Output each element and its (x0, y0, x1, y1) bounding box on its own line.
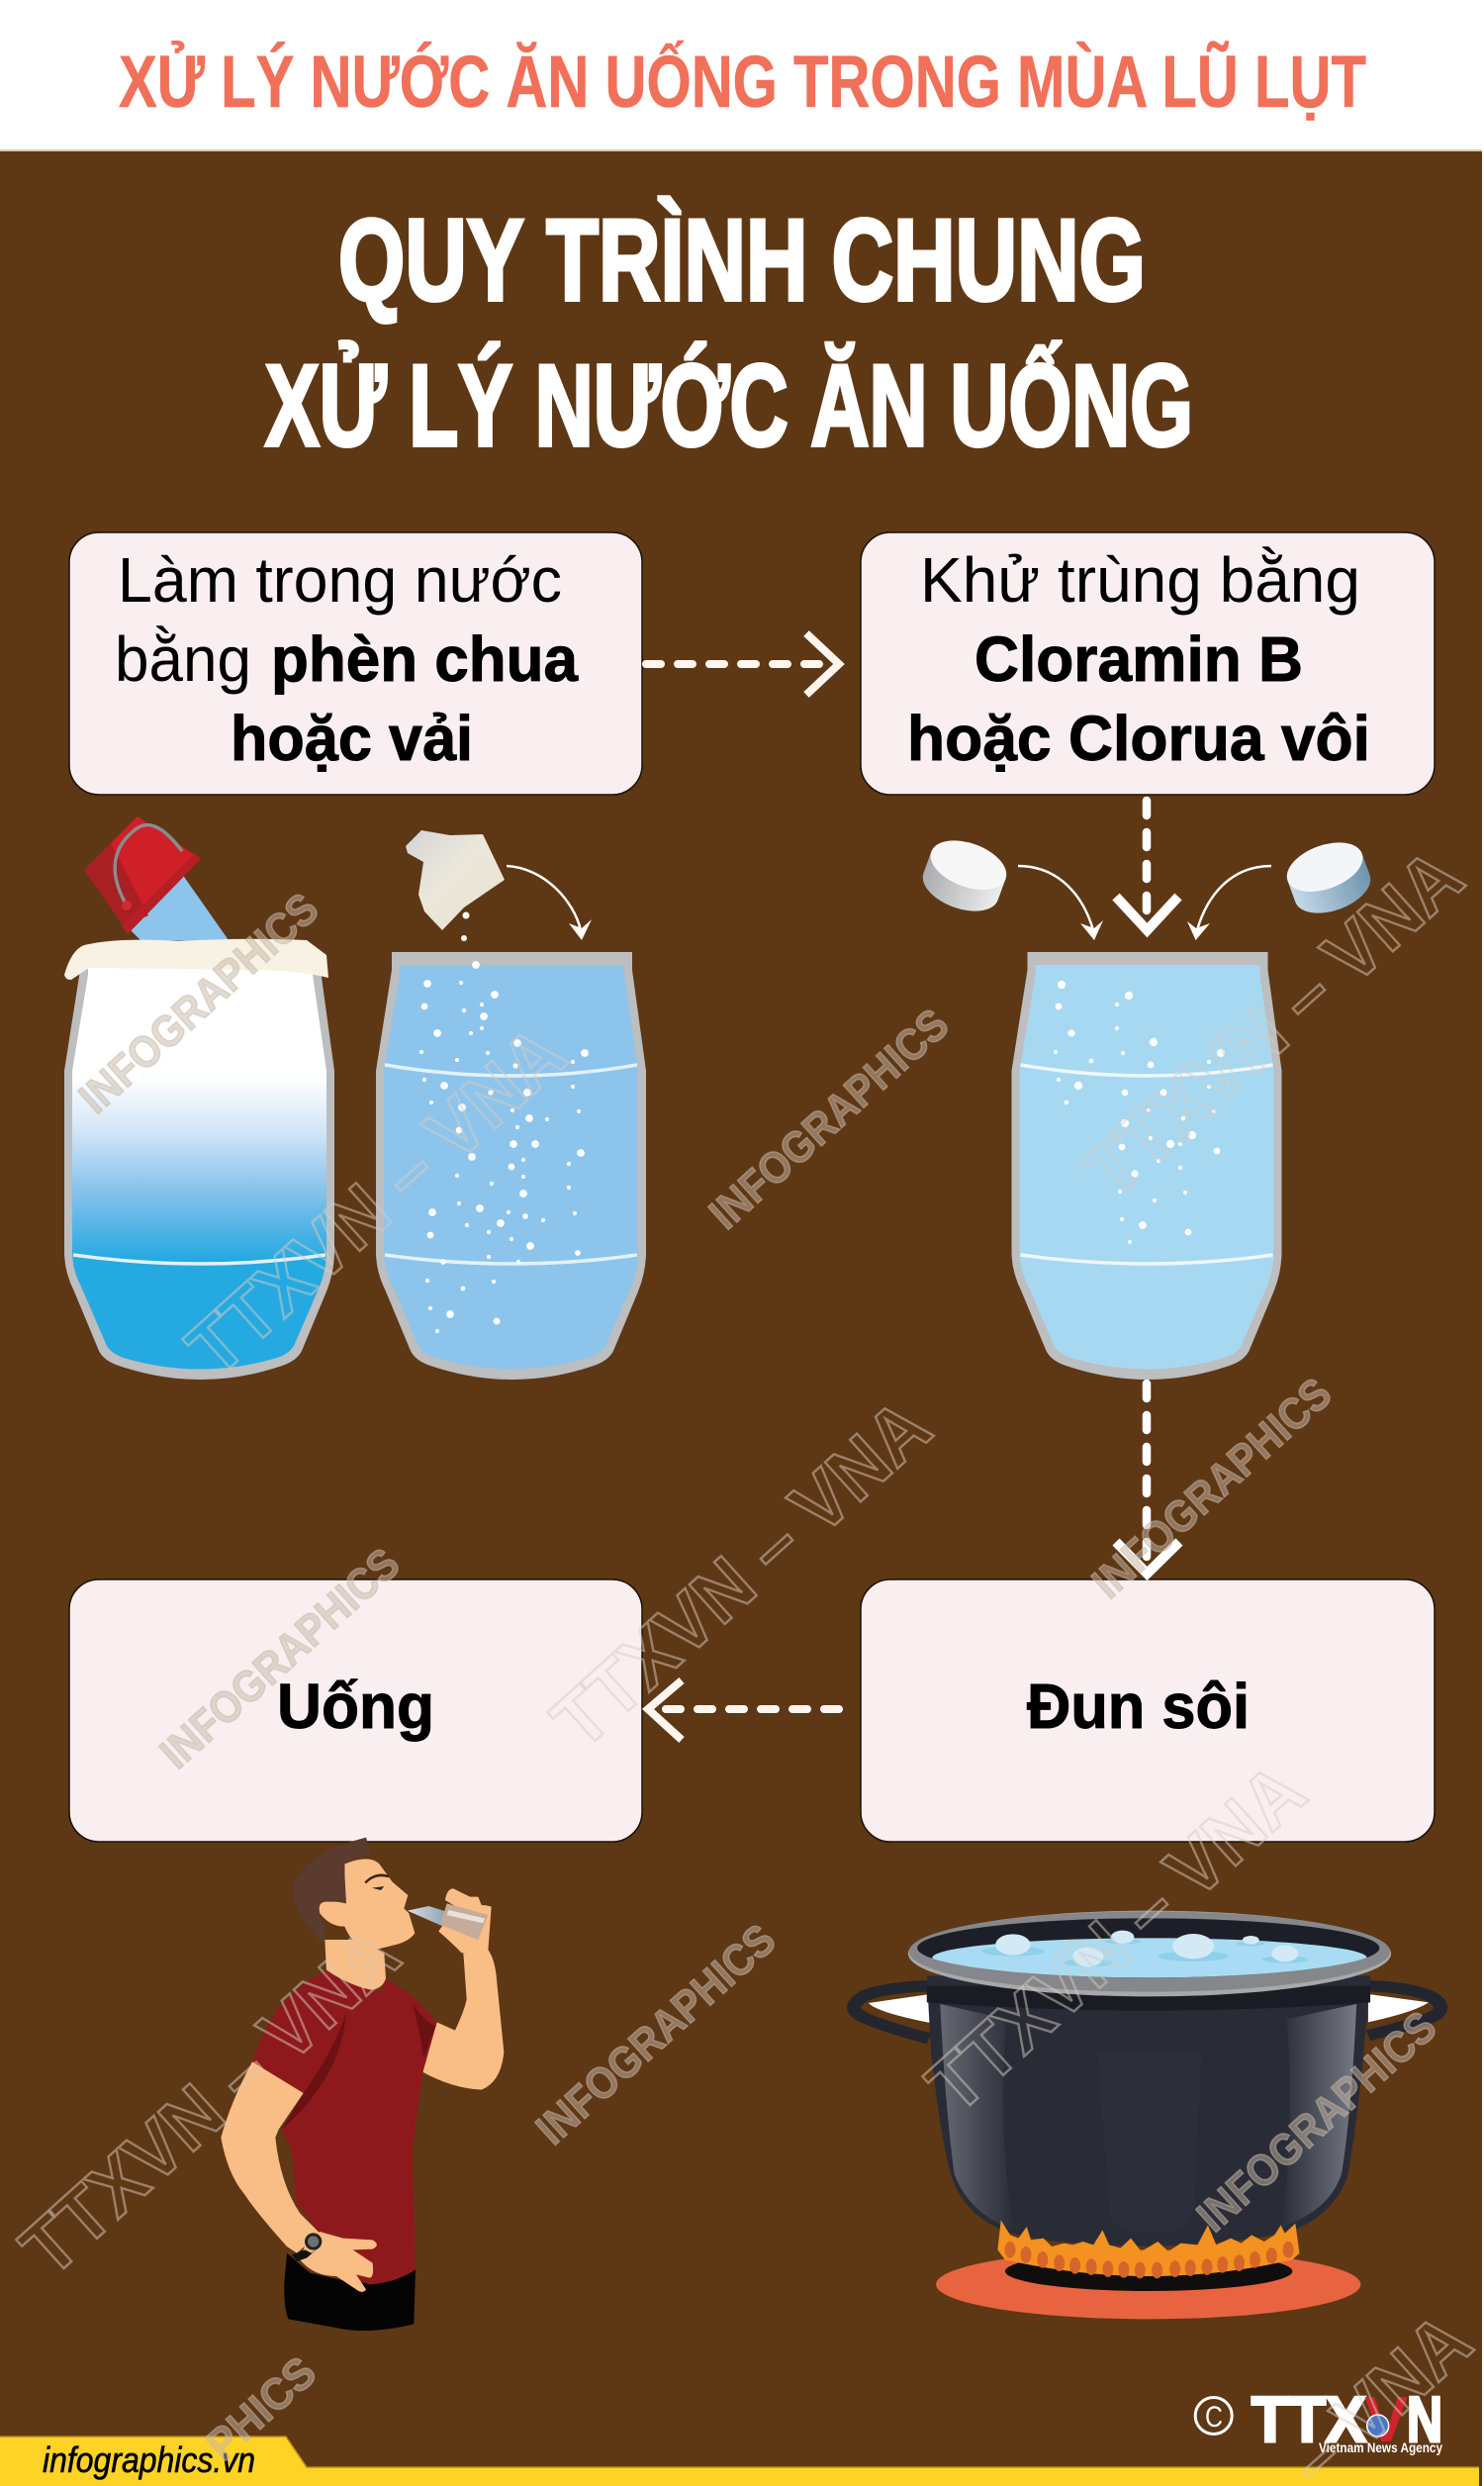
pot rim (908, 1911, 1391, 1996)
watermarks: INFOGRAPHICS (1082, 1368, 1341, 1608)
watermarks: TTXVN – VNA (535, 1383, 947, 1765)
watermarks: INFOGRAPHICS (699, 999, 958, 1239)
website label: infographics.vn (43, 2439, 255, 2480)
hand and glass (438, 1888, 492, 1953)
pot body (927, 1976, 1370, 2247)
arrow: disinfect to jar (1116, 801, 1178, 930)
step box: boil (861, 1579, 1435, 1842)
burner (1005, 2251, 1292, 2291)
icon: alum rock (406, 830, 505, 941)
head (320, 1859, 415, 1952)
logo: TTXVN: Vietnam News Agency (1319, 2439, 1442, 2455)
watermarks: INFOGRAPHICS (150, 1538, 409, 1778)
hand on hip (300, 2232, 377, 2292)
icon: chlorine tablet right (1280, 833, 1377, 922)
main title: QUY TRÌNH CHUNG (338, 195, 1146, 325)
watermarks: PHICS (196, 2346, 325, 2470)
cloth filter (64, 939, 328, 980)
hair (293, 1838, 371, 1945)
step box: drink: Uống (277, 1671, 434, 1742)
watermarks: INFOGRAPHICS (1187, 2001, 1445, 2242)
logo: TTXVN: N (1407, 2383, 1442, 2455)
arrow: jar to boil (1116, 1384, 1179, 1574)
icon: jar with alum particles (376, 952, 646, 1380)
arrow: alum into jar (507, 866, 592, 940)
step box: clarify water (69, 532, 642, 795)
logo: TTXVN: TTX (1252, 2383, 1366, 2455)
arrow: boil to drink (648, 1680, 839, 1740)
step box: disinfect: Cloramin B (974, 623, 1303, 695)
icon: filter jar with cloth (64, 939, 334, 1380)
step box: drink (69, 1579, 642, 1842)
logo: TTXVN: V (1364, 2383, 1408, 2455)
step box: clarify water: bằng (115, 623, 251, 695)
main title (265, 195, 1193, 470)
step box: disinfect: hoặc Clorua vôi (907, 703, 1370, 774)
step box: disinfect: Khử trùng bằng (920, 544, 1360, 616)
watermarks: TTXVN – VNA (4, 1910, 416, 2292)
pot handles (869, 1994, 930, 2023)
arrow: clarify to disinfect (646, 633, 839, 695)
watermarks: TTXVN – VNA (170, 1009, 582, 1391)
upper arm (221, 2061, 320, 2253)
watermarks: TTXVN – VNA (910, 1747, 1322, 2129)
step box: clarify water: hoặc vải (231, 703, 473, 774)
watermarks (4, 832, 1484, 2486)
boiling water (932, 1931, 1367, 1977)
shirt (252, 1970, 437, 2284)
illustration: boiling pot on stove (854, 1911, 1440, 2319)
logo: TTXVN: C (1205, 2401, 1223, 2434)
pants (284, 2253, 416, 2331)
watermarks: INFOGRAPHICS (69, 883, 327, 1123)
step box: clarify water: Làm trong nước (118, 544, 562, 616)
icon: disinfected water jar (1011, 952, 1282, 1380)
illustration: man drinking water (221, 1838, 504, 2331)
neck (325, 1940, 386, 1990)
header band (0, 0, 1484, 151)
arrow: right tablet into jar (1187, 866, 1271, 940)
arrow: left tablet into jar (1018, 866, 1103, 940)
step box: boil: Đun sôi (1027, 1671, 1250, 1742)
forearm (422, 1950, 504, 2090)
stove plate (936, 2249, 1360, 2319)
logo: TTXVN (1195, 2383, 1442, 2455)
flames (997, 2220, 1300, 2276)
step box: disinfect (861, 532, 1435, 795)
icon: bucket pouring (84, 816, 229, 941)
step box: clarify water: phèn chua (271, 623, 578, 695)
icon: chlorine tablet left (916, 831, 1013, 920)
footer bar (0, 2437, 1479, 2486)
watermarks: INFOGRAPHICS (526, 1914, 785, 2154)
watch (292, 2247, 320, 2261)
